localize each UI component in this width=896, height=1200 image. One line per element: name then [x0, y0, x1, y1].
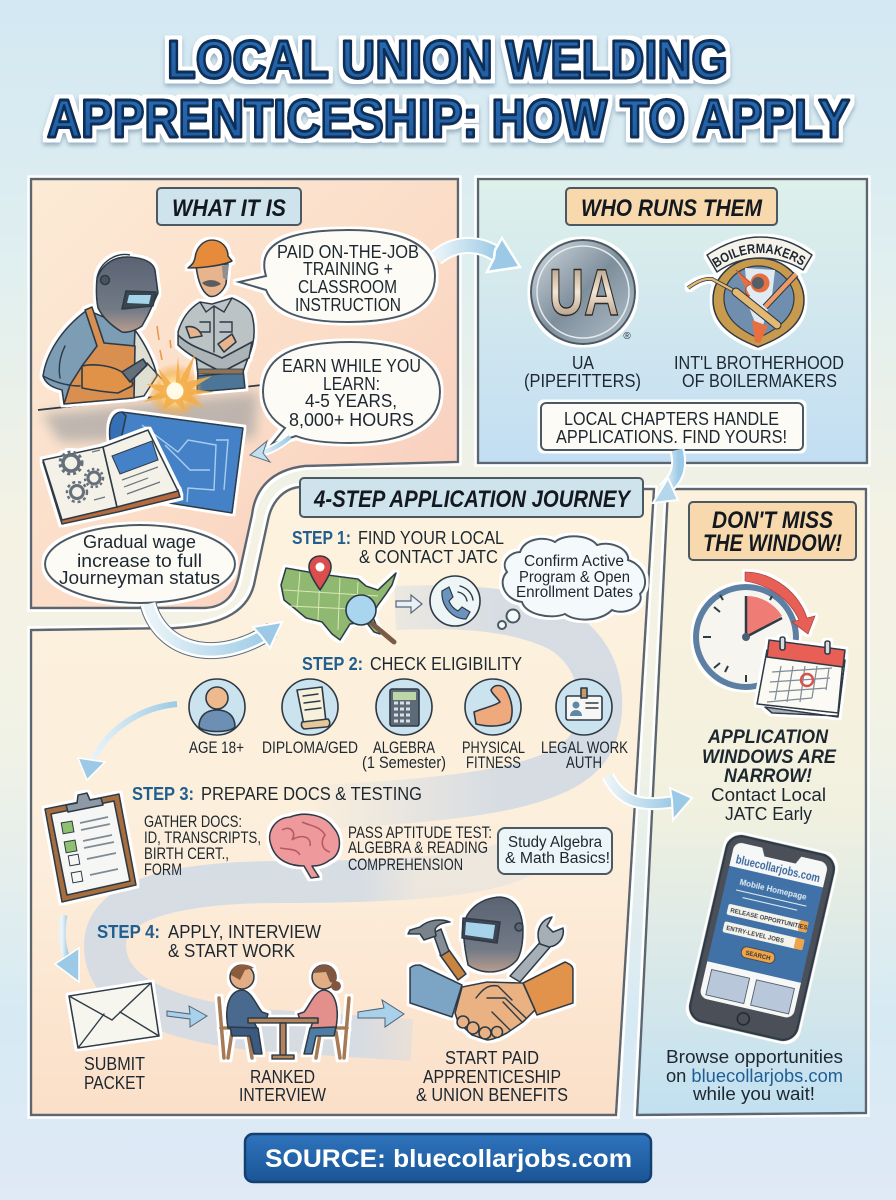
label: start paid apprenticeship: START PAID	[445, 1048, 539, 1068]
text: browse opportunities: Browse opportunities	[666, 1047, 843, 1067]
arrow: envelope to interview	[167, 1006, 207, 1027]
text: gather docs	[144, 812, 261, 879]
label: ranked interview	[239, 1067, 326, 1105]
heading: don't miss	[689, 502, 856, 560]
label: algebra: (1 Semester)	[362, 753, 446, 772]
label: ranked interview: INTERVIEW	[239, 1085, 326, 1105]
label: pipefitters: (PIPEFITTERS)	[524, 371, 641, 391]
icon: foreman	[178, 240, 254, 392]
step 3 heading: PREPARE DOCS & TESTING	[201, 784, 422, 804]
text: browse opportunities: on bluecollarjobs.com	[666, 1066, 843, 1086]
label: physical fitness	[462, 738, 525, 772]
label: UA: UA	[572, 353, 594, 373]
icon: mobile phone: Mobile Homepage	[739, 878, 808, 902]
text: application windows	[702, 727, 837, 824]
icon: welding spark	[143, 326, 214, 419]
arrow: paid training to who runs them	[436, 238, 520, 272]
icon: calculator	[376, 679, 432, 735]
logo: boilermakers: BOILERMAKERS	[712, 244, 806, 268]
label: algebra: ALGEBRA	[373, 738, 436, 757]
arrow: interview to start	[358, 1000, 404, 1027]
callout: study algebra: Study Algebra	[508, 834, 602, 851]
text: gather docs: BIRTH CERT.,	[144, 844, 229, 863]
callout: local chapters: LOCAL CHAPTERS HANDLE	[564, 409, 779, 429]
heading: who runs them	[566, 188, 777, 225]
heading: don't miss: THE WINDOW!	[703, 530, 842, 557]
text: application windows: NARROW!	[724, 766, 812, 787]
heading: who runs them: WHO RUNS THEM	[581, 195, 763, 222]
label: physical fitness: FITNESS	[466, 753, 521, 772]
label: ranked interview: RANKED	[250, 1067, 315, 1087]
step 2 heading: STEP 2:	[302, 654, 363, 674]
label: legal work auth: LEGAL WORK	[541, 738, 629, 757]
icon: interview people	[219, 964, 349, 1059]
label: legal work auth: AUTH	[566, 753, 602, 772]
thought cloud: confirm program: Confirm Active	[524, 553, 624, 570]
label: diploma: DIPLOMA/GED	[262, 738, 358, 757]
label: physical fitness: PHYSICAL	[462, 738, 525, 757]
speech bubble: gradual wage: Journeyman status	[59, 568, 220, 588]
label: algebra	[362, 738, 446, 772]
label: submit packet	[84, 1054, 145, 1093]
speech bubble: paid training: PAID ON-THE-JOB	[277, 242, 419, 262]
icon: clipboard	[45, 793, 136, 902]
winding road: upper	[300, 607, 600, 808]
text: gather docs: GATHER DOCS:	[144, 812, 242, 831]
step 1 heading: STEP 1:	[292, 528, 351, 548]
arrow: clipboard to envelope	[55, 915, 79, 982]
text: application windows: WINDOWS ARE	[702, 747, 837, 768]
text: application windows: APPLICATION	[707, 727, 829, 748]
label: age: AGE 18+	[189, 738, 244, 757]
step 1 heading: & CONTACT JATC	[359, 547, 498, 567]
thought cloud: confirm program	[498, 536, 645, 629]
arrow: eligibility to step 3	[78, 704, 177, 780]
label: international brotherhood: OF BOILERMAKERS	[682, 371, 837, 391]
label: international brotherhood	[674, 353, 844, 391]
icon: age	[189, 679, 245, 735]
icon: US map with pin	[281, 556, 396, 642]
icon: flexed arm	[465, 679, 521, 735]
heading: don't miss: DON'T MISS	[712, 507, 833, 534]
thought cloud: confirm program: Enrollment Dates	[516, 584, 633, 601]
icon: calendar	[757, 637, 845, 717]
icon: work ID	[556, 679, 612, 735]
panel: who runs them	[474, 175, 871, 467]
heading: journey: 4-STEP APPLICATION JOURNEY	[313, 486, 632, 513]
arrow: legal work to window	[608, 776, 692, 820]
text: browse opportunities: while you wait!	[692, 1084, 815, 1104]
arrow: map to phone	[396, 595, 422, 613]
winding road: lower	[105, 830, 541, 1040]
arrow: gradual wage to step 1	[148, 604, 282, 651]
icon: welder	[43, 254, 170, 404]
speech bubble: paid training: CLASSROOM	[298, 277, 397, 297]
speech bubble: earn while you learn: 8,000+ HOURS	[289, 410, 414, 430]
callout: local chapters	[541, 403, 803, 450]
thought cloud: confirm program: Program & Open	[519, 569, 630, 586]
icon: mobile phone: ENTRY-LEVEL JOBS	[725, 926, 784, 945]
title: LOCAL UNION WELDING	[167, 30, 728, 90]
icon: brain	[270, 814, 339, 878]
step 1 heading: FIND YOUR LOCAL	[358, 528, 504, 548]
panel: what it is	[31, 179, 458, 608]
icon: open book	[43, 430, 180, 524]
heading: what it is	[157, 188, 301, 225]
panel: don't miss the window	[637, 489, 866, 1115]
icon: diploma	[282, 679, 338, 735]
speech bubble: earn while you learn: 4-5 YEARS,	[305, 391, 397, 411]
icon: mobile phone	[687, 833, 837, 1043]
icon: mobile phone: RELEASE OPPORTUNITIES	[730, 908, 808, 932]
icon: mobile phone: bluecollarjobs.com	[734, 854, 821, 885]
step 4 heading: & START WORK	[168, 941, 295, 961]
step 3 heading: STEP 3:	[132, 784, 194, 804]
speech bubble: earn while you learn: EARN WHILE YOU	[282, 356, 421, 376]
heading: what it is: WHAT IT IS	[172, 195, 286, 222]
callout: local chapters: APPLICATIONS. FIND YOURS!	[556, 427, 787, 447]
source button	[245, 1134, 651, 1182]
label: legal work auth	[541, 738, 629, 772]
icon: mobile phone: SEARCH	[745, 951, 771, 962]
step 4 heading: APPLY, INTERVIEW	[168, 922, 321, 942]
callout: study algebra	[498, 828, 612, 874]
text: aptitude test: PASS APTITUDE TEST:	[348, 823, 492, 842]
step 2 heading: CHECK ELIGIBILITY	[370, 654, 522, 674]
text: application windows: JATC Early	[725, 803, 813, 824]
callout: study algebra: & Math Basics!	[505, 850, 610, 867]
logo: UA: UA	[549, 255, 619, 329]
label: international brotherhood: INT'L BROTHERHOOD	[674, 353, 844, 373]
speech bubble: gradual wage	[45, 525, 235, 603]
label: submit packet: PACKET	[84, 1073, 145, 1093]
text: aptitude test: COMPREHENSION	[348, 855, 463, 874]
speech bubble: earn while you learn: LEARN:	[323, 374, 380, 394]
speech bubble: gradual wage: Gradual wage	[83, 532, 196, 552]
logo: UA	[531, 240, 635, 344]
icon: handshake with tools	[408, 897, 573, 1040]
speech bubble: paid training	[239, 230, 435, 322]
step 4 heading	[97, 922, 321, 961]
label: submit packet: SUBMIT	[84, 1054, 145, 1074]
arrow: local chapters to journey	[653, 450, 679, 503]
label: start paid apprenticeship	[416, 1048, 568, 1105]
speech bubble: paid training: TRAINING +	[303, 259, 393, 279]
source button: SOURCE: bluecollarjobs.com	[265, 1145, 632, 1173]
label: start paid apprenticeship: APPRENTICESHIP	[423, 1067, 561, 1087]
arrow: earn while you learn to blueprint	[250, 437, 290, 462]
text: aptitude test	[348, 823, 492, 874]
icon: blueprint	[110, 412, 243, 513]
logo: UA: ®	[623, 331, 631, 342]
icon: envelope	[69, 983, 159, 1048]
heading: journey	[300, 478, 643, 517]
text: application windows: Contact Local	[711, 784, 826, 805]
title	[47, 30, 850, 149]
step 2 heading	[302, 654, 522, 674]
icon: clock	[696, 572, 815, 687]
label: start paid apprenticeship: & UNION BENEFITS	[416, 1085, 568, 1105]
text: aptitude test: ALGEBRA & READING	[348, 838, 488, 857]
text: gather docs: FORM	[144, 860, 182, 879]
workbench	[38, 385, 262, 442]
text: gather docs: ID, TRANSCRIPTS,	[144, 828, 261, 847]
step 4 heading: STEP 4:	[97, 922, 160, 942]
text: browse opportunities	[666, 1047, 843, 1104]
speech bubble: paid training: INSTRUCTION	[295, 295, 401, 315]
speech bubble: gradual wage: increase to full	[77, 551, 202, 571]
panel: application journey	[31, 478, 654, 1115]
logo: boilermakers	[684, 234, 816, 350]
icon: phone call	[430, 576, 480, 626]
step 1 heading	[292, 528, 504, 567]
speech bubble: earn while you learn	[263, 342, 440, 444]
